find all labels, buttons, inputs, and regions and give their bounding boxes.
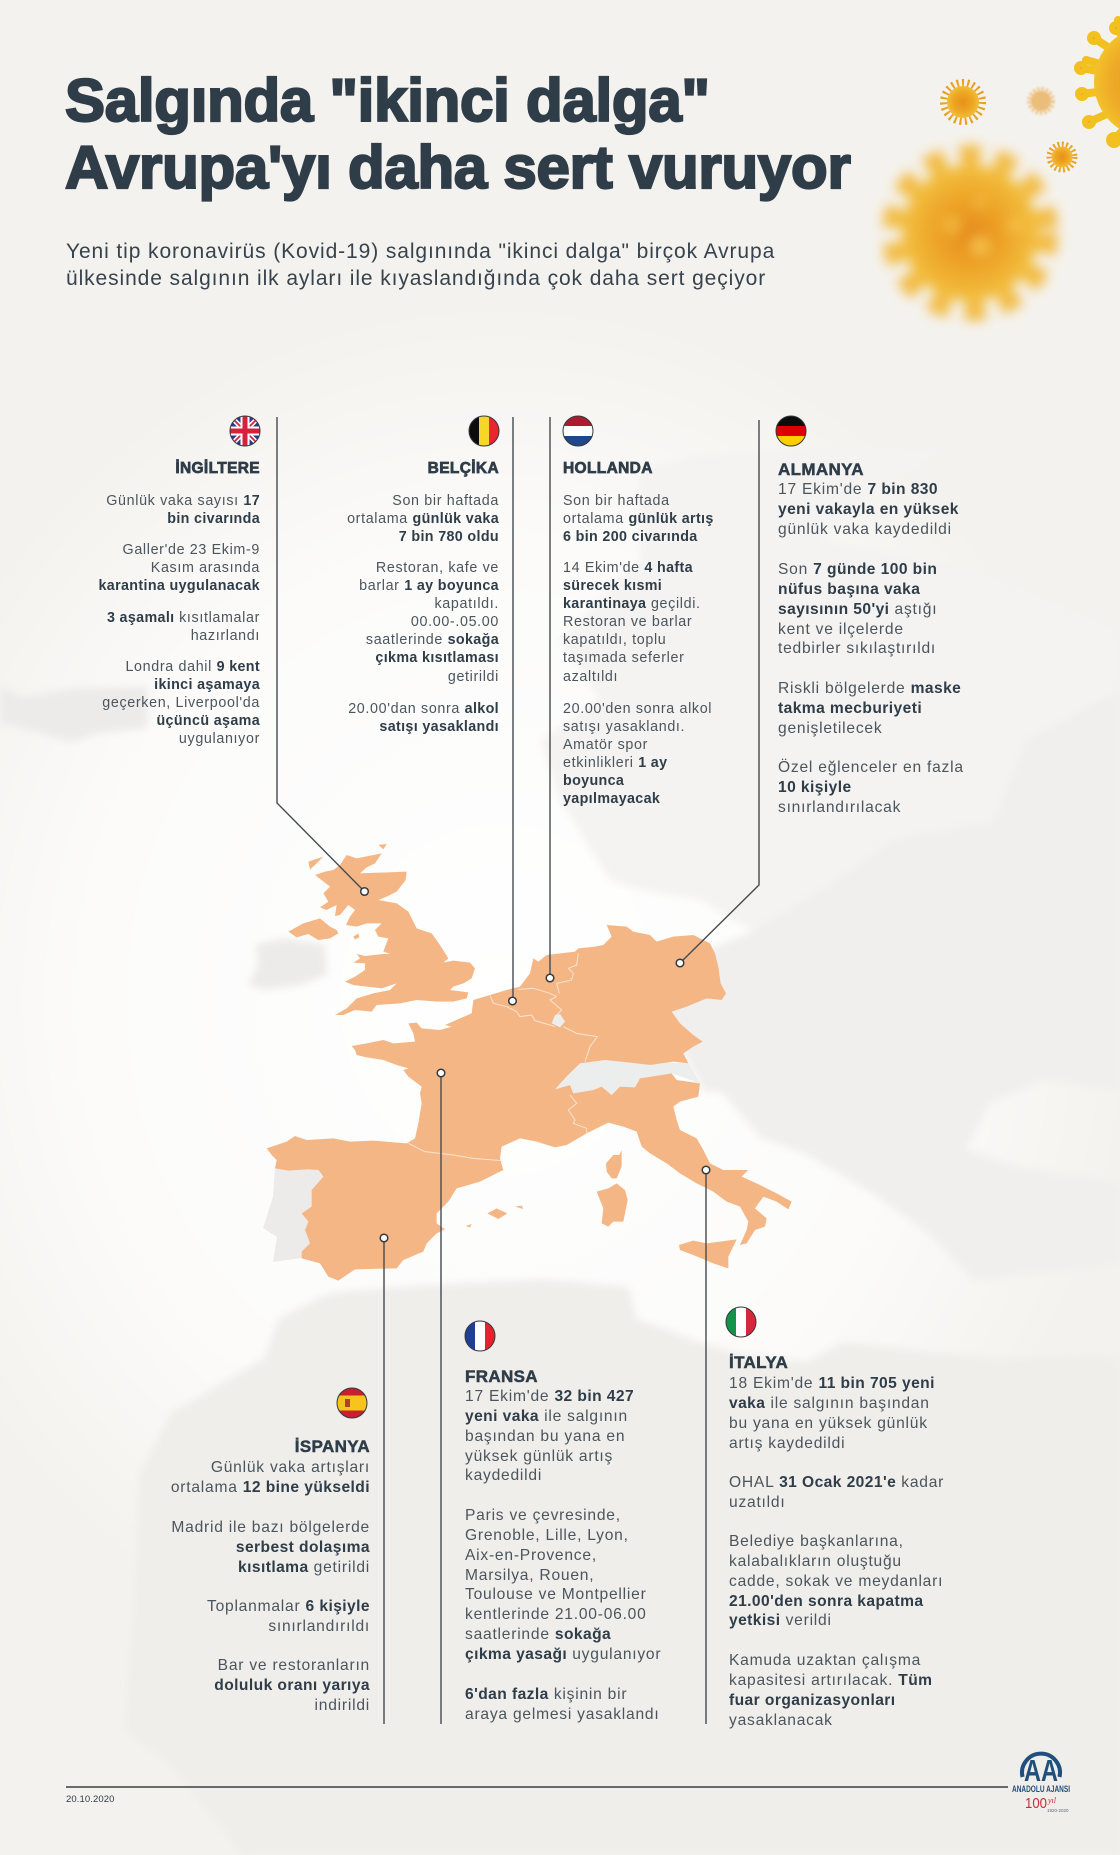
- text block: kısıtlama getirildi: [238, 1559, 370, 1576]
- date: 20.10.2020: [66, 1794, 115, 1805]
- text block: 00.00-.05.00: [411, 614, 499, 630]
- text block: sınırlandırıldı: [268, 1618, 370, 1635]
- text block: kalabalıkların oluştuğu: [729, 1553, 902, 1570]
- text block: [207, 1598, 370, 1635]
- text block: karantinaya geçildi.: [563, 596, 701, 612]
- text block: kapatıldı, toplu: [563, 632, 666, 648]
- text block: Günlük vaka artışları: [211, 1459, 370, 1476]
- icon: small virus lower: [1050, 145, 1074, 169]
- flag: France: [465, 1321, 495, 1351]
- text block: çıkma kısıtlaması: [375, 650, 499, 666]
- footer rule: [66, 1786, 1008, 1788]
- flag: Italy: [726, 1307, 756, 1337]
- text block: fuar organizasyonları: [729, 1692, 896, 1709]
- text block: Toplanmalar 6 kişiyle: [207, 1598, 370, 1615]
- flag: Belgium: [469, 416, 499, 446]
- title: [65, 67, 852, 202]
- text block: Son 7 günde 100 bin: [778, 561, 937, 578]
- flag: Spain: [337, 1388, 367, 1418]
- text block: serbest dolaşıma: [236, 1539, 370, 1556]
- panel: Belçika: [347, 459, 499, 735]
- heading: İSPANYA: [295, 1437, 370, 1456]
- title: Avrupa'yı daha sert vuruyor: [65, 134, 851, 201]
- text block: barlar 1 ay boyunca: [359, 578, 499, 594]
- text block: [778, 481, 959, 538]
- text block: kentlerinde 21.00-06.00: [465, 1606, 647, 1623]
- text block: ortalama günlük artış: [563, 511, 714, 527]
- text block: artış kaydedildi: [729, 1435, 845, 1452]
- text block: sayısının 50'yi aştığı: [778, 601, 937, 618]
- text block: yüksek günlük artış: [465, 1448, 613, 1465]
- text block: kapasitesi artırılacak. Tüm: [729, 1672, 932, 1689]
- text block: 17 Ekim'de 7 bin 830: [778, 481, 938, 498]
- text block: bin civarında: [167, 511, 260, 527]
- text block: getirildi: [448, 669, 499, 685]
- text block: 3 aşamalı kısıtlamalar: [107, 610, 260, 626]
- icon: small virus left: [944, 83, 982, 121]
- panel: Almanya: [778, 460, 964, 816]
- text block: [465, 1507, 661, 1663]
- text block: [563, 701, 712, 807]
- text block: başından bu yana en: [465, 1428, 625, 1445]
- text block: Bar ve restoranların: [218, 1657, 370, 1674]
- heading: ALMANYA: [778, 460, 864, 479]
- logo: Anadolu Ajansi: 100: [1025, 1795, 1047, 1812]
- logo: Anadolu Ajansi: [1012, 1753, 1070, 1813]
- text block: günlük vaka kaydedildi: [778, 521, 952, 538]
- text block: [563, 493, 714, 545]
- icon: blurred large virus: [898, 161, 1042, 305]
- text block: yasaklanacak: [729, 1712, 833, 1729]
- text block: Riskli bölgelerde maske: [778, 680, 961, 697]
- text block: yeni vakayla en yüksek: [778, 501, 959, 518]
- text block: ortalama günlük vaka: [347, 511, 499, 527]
- text block: takma mecburiyeti: [778, 700, 922, 717]
- text block: genişletilecek: [778, 720, 882, 737]
- text block: yeni vaka ile salgının: [465, 1408, 628, 1425]
- text block: karantina uygulanacak: [98, 578, 260, 594]
- text block: geçerken, Liverpool'da: [102, 695, 260, 711]
- text block: Aix-en-Provence,: [465, 1547, 597, 1564]
- text block: yetkisi verildi: [729, 1612, 832, 1629]
- text block: uzatıldı: [729, 1494, 785, 1511]
- virus decorations: [874, 16, 1120, 330]
- text block: Paris ve çevresinde,: [465, 1507, 621, 1524]
- text block: uygulanıyor: [179, 731, 260, 747]
- subtitle: [66, 240, 775, 290]
- text block: Özel eğlenceler en fazla: [778, 759, 964, 776]
- text block: [347, 493, 499, 545]
- text block: saatlerinde sokağa: [465, 1626, 611, 1643]
- Portugal: [263, 1168, 323, 1262]
- text block: 14 Ekim'de 4 hafta: [563, 560, 693, 576]
- text block: taşımada seferler: [563, 650, 685, 666]
- text block: [107, 610, 260, 644]
- text block: hazırlandı: [191, 628, 260, 644]
- text block: Kasım arasında: [151, 560, 260, 576]
- text block: Belediye başkanlarına,: [729, 1533, 904, 1550]
- text block: doluluk oranı yarıya: [214, 1677, 370, 1694]
- heading: BELÇİKA: [428, 460, 499, 477]
- text block: [106, 493, 260, 527]
- text block: 20.00'den sonra alkol: [563, 701, 712, 717]
- icon: pale blurred virus: [1030, 90, 1052, 112]
- panel: İspanya: [171, 1437, 370, 1714]
- text block: [98, 542, 260, 594]
- subtitle: Yeni tip koronavirüs (Kovid-19) salgınında "ikinci dalga" birçok Avrupa: [66, 240, 775, 263]
- text block: araya gelmesi yasaklandı: [465, 1706, 659, 1723]
- logo: Anadolu Ajansi: 1920-2020: [1047, 1808, 1069, 1813]
- panel: İtalya: [729, 1353, 944, 1729]
- heading: İNGİLTERE: [175, 460, 260, 477]
- continental countries: [267, 925, 792, 1281]
- text block: Grenoble, Lille, Lyon,: [465, 1527, 629, 1544]
- text block: bu yana en yüksek günlük: [729, 1415, 928, 1432]
- text block: [348, 701, 499, 735]
- text block: vaka ile salgının başından: [729, 1395, 930, 1412]
- text block: cadde, sokak ve meydanları: [729, 1573, 943, 1590]
- text block: [729, 1375, 935, 1452]
- text block: Restoran, kafe ve: [376, 560, 499, 576]
- text block: Marsilya, Rouen,: [465, 1567, 594, 1584]
- text block: Son bir haftada: [392, 493, 499, 509]
- flag: Netherlands: [563, 416, 593, 446]
- text block: 10 kişiyle: [778, 779, 852, 796]
- panel: İngiltere: [98, 459, 260, 747]
- text block: [359, 560, 499, 685]
- text block: kent ve ilçelerde: [778, 621, 904, 638]
- Switzerland and Luxembourg: [555, 1060, 700, 1095]
- icon: large virus at right edge: [1078, 20, 1120, 144]
- logo: Anadolu Ajansi: AA: [1024, 1753, 1058, 1788]
- panel: Hollanda: [563, 460, 714, 807]
- text block: yapılmayacak: [563, 791, 660, 807]
- text block: saatlerinde sokağa: [366, 632, 499, 648]
- panel: Fransa: [465, 1367, 661, 1723]
- text block: Galler'de 23 Ekim-9: [123, 542, 260, 558]
- logo: Anadolu Ajansi: yıl: [1047, 1796, 1057, 1805]
- text block: Son bir haftada: [563, 493, 670, 509]
- leader lines and map pins: [66, 416, 1070, 1812]
- flag: United Kingdom: [230, 416, 260, 446]
- text block: üçüncü aşama: [156, 713, 260, 729]
- text block: 7 bin 780 oldu: [399, 529, 499, 545]
- text block: Londra dahil 9 kent: [125, 659, 260, 675]
- text block: 20.00'dan sonra alkol: [348, 701, 499, 717]
- text block: [778, 561, 937, 657]
- text block: 21.00'den sonra kapatma: [729, 1593, 924, 1610]
- text block: sürecek kısmi: [563, 578, 662, 594]
- text block: [214, 1657, 370, 1714]
- heading: İTALYA: [729, 1353, 788, 1372]
- heading: FRANSA: [465, 1367, 538, 1386]
- text block: 18 Ekim'de 11 bin 705 yeni: [729, 1375, 935, 1392]
- text block: [102, 659, 260, 747]
- text block: Günlük vaka sayısı 17: [106, 493, 260, 509]
- United Kingdom: [288, 844, 475, 1015]
- text block: 6'dan fazla kişinin bir: [465, 1686, 627, 1703]
- text block: [778, 758, 964, 816]
- text block: kapatıldı.: [434, 596, 499, 612]
- text block: [563, 560, 701, 685]
- text block: etkinlikleri 1 ay: [563, 755, 667, 771]
- text block: boyunca: [563, 773, 624, 789]
- flag: Germany: [776, 416, 806, 446]
- text block: [171, 1519, 370, 1576]
- text block: Toulouse ve Montpellier: [465, 1586, 647, 1603]
- text block: ortalama 12 bine yükseldi: [171, 1479, 370, 1496]
- text block: kaydedildi: [465, 1467, 542, 1484]
- text block: indirildi: [315, 1697, 370, 1714]
- text block: ikinci aşamaya: [154, 677, 260, 693]
- text block: Restoran ve barlar: [563, 614, 692, 630]
- text block: OHAL 31 Ocak 2021'e kadar: [729, 1474, 944, 1491]
- text block: Amatör spor: [563, 737, 648, 753]
- text block: [778, 680, 961, 737]
- text block: [171, 1459, 370, 1496]
- text block: satışı yasaklandı: [379, 719, 499, 735]
- text block: nüfus başına vaka: [778, 581, 920, 598]
- text block: çıkma yasağı uygulanıyor: [465, 1646, 661, 1663]
- text block: [465, 1388, 634, 1484]
- subtitle: ülkesinde salgının ilk ayları ile kıyaslandığında çok daha sert geçiyor: [66, 267, 766, 290]
- text block: Kamuda uzaktan çalışma: [729, 1652, 921, 1669]
- text block: [729, 1533, 943, 1629]
- text block: satışı yasaklandı.: [563, 719, 685, 735]
- title: Salgında "ikinci dalga": [65, 67, 710, 134]
- text block: Madrid ile bazı bölgelerde: [171, 1519, 370, 1536]
- text block: 17 Ekim'de 32 bin 427: [465, 1388, 634, 1405]
- text block: [465, 1686, 659, 1723]
- text block: sınırlandırılacak: [778, 799, 901, 816]
- logo: Anadolu Ajansi: ANADOLU AJANSI: [1012, 1784, 1070, 1794]
- text block: [729, 1474, 944, 1511]
- text block: azaltıldı: [563, 669, 618, 685]
- text block: [729, 1652, 932, 1729]
- text block: 6 bin 200 civarında: [563, 529, 698, 545]
- heading: HOLLANDA: [563, 460, 653, 477]
- text block: tedbirler sıkılaştırıldı: [778, 640, 936, 657]
